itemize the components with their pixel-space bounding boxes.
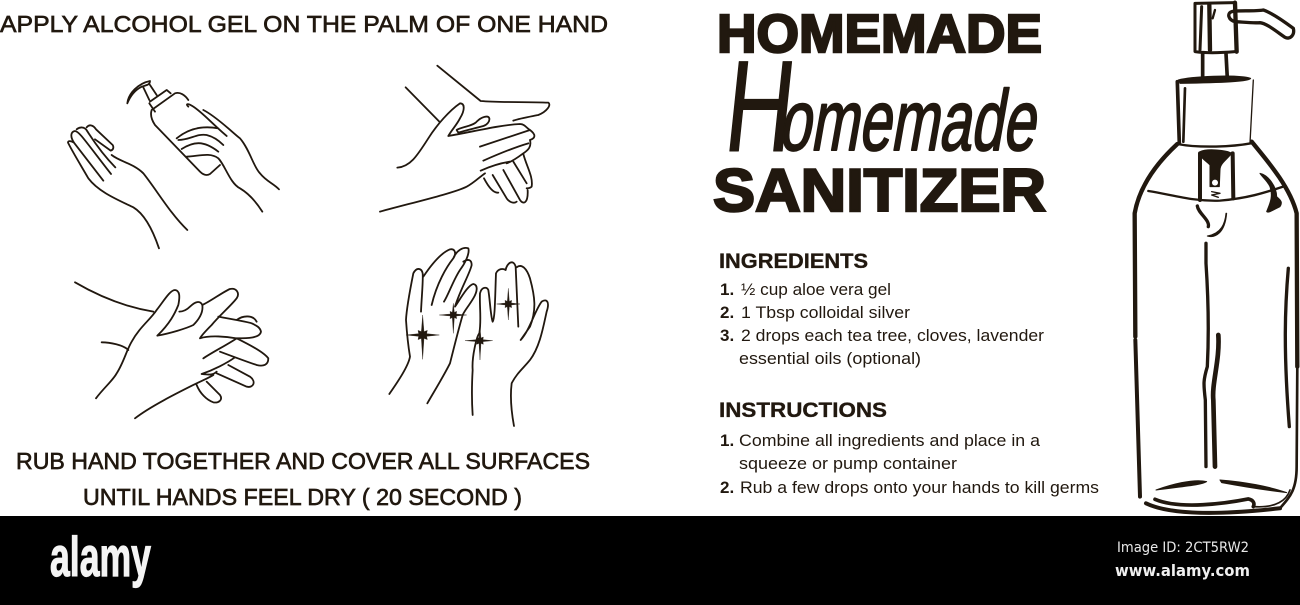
pump bottle [127, 81, 220, 175]
step 2 instruction [16, 448, 590, 510]
lower hand pointing right [406, 66, 549, 133]
step 1 heading: APPLY ALCOHOL GEL ON THE PALM OF ONE HAND [0, 11, 608, 37]
instruction 1 continued: squeeze or pump container [739, 454, 957, 473]
ingredient 3 text: 2 drops each tea tree, cloves, lavender [741, 326, 1044, 345]
website: www.alamy.com [1115, 561, 1250, 580]
instructions heading: INSTRUCTIONS [719, 399, 887, 422]
title line: HOMEMADE: HOMEMADE [717, 4, 1042, 64]
back hand [75, 282, 202, 398]
image id: Image ID: 2CT5RW2 [1117, 540, 1249, 556]
pouring right hand [177, 104, 279, 212]
ingredients heading: INGREDIENTS [719, 250, 868, 273]
ingredient 1: 1. [720, 280, 734, 299]
left clean hand [389, 248, 477, 403]
alamy logo: alamy [50, 525, 151, 588]
fingers behind [484, 154, 532, 203]
label line and dip tube [1148, 150, 1285, 237]
instruction 2 text: Rub a few drops onto your hands to kill germs [740, 478, 1099, 497]
watermark bar [0, 516, 1300, 605]
illustration: two clean sparkling hands [389, 248, 548, 426]
sparkle stars [406, 288, 520, 360]
illustration: pump bottle [1135, 3, 1297, 513]
instruction line one: RUB HAND TOGETHER AND COVER ALL SURFACES [16, 448, 590, 474]
ingredient 3: 3. [720, 326, 734, 345]
title line: SANITIZER: SANITIZER [713, 157, 1046, 224]
title block [713, 4, 1047, 224]
ingredient 2: 2. [720, 303, 734, 322]
illustration: pouring gel from pump bottle into palm [68, 81, 279, 248]
front hand fingers [135, 289, 268, 418]
ingredient 1 text: ½ cup aloe vera gel [741, 280, 891, 299]
illustration: interlaced fingers [75, 282, 268, 418]
receiving left hand [68, 125, 187, 248]
ingredients section [719, 250, 1044, 368]
instruction line two: UNTIL HANDS FEEL DRY ( 20 SECOND ) [83, 484, 522, 510]
instruction 2: 2. [720, 478, 734, 497]
ingredient 2 text: 1 Tbsp colloidal silver [741, 303, 910, 322]
bottle base [1146, 480, 1290, 513]
upper hand with thumb [380, 103, 534, 212]
bottle body outline [1135, 142, 1297, 508]
illustration: rubbing back of the hand [380, 66, 549, 212]
instruction 1: 1. [720, 431, 734, 450]
ingredient 3 continued: essential oils (optional) [739, 349, 921, 368]
inner reflections [1204, 243, 1289, 467]
instructions section [719, 399, 1099, 497]
collar [1177, 76, 1253, 147]
pump head and spout [1195, 3, 1294, 78]
title script: omemade: omemade [775, 74, 1047, 169]
instruction 1 text: Combine all ingredients and place in a [739, 431, 1041, 450]
right clean hand [472, 262, 548, 426]
title script: H: H [719, 33, 802, 179]
